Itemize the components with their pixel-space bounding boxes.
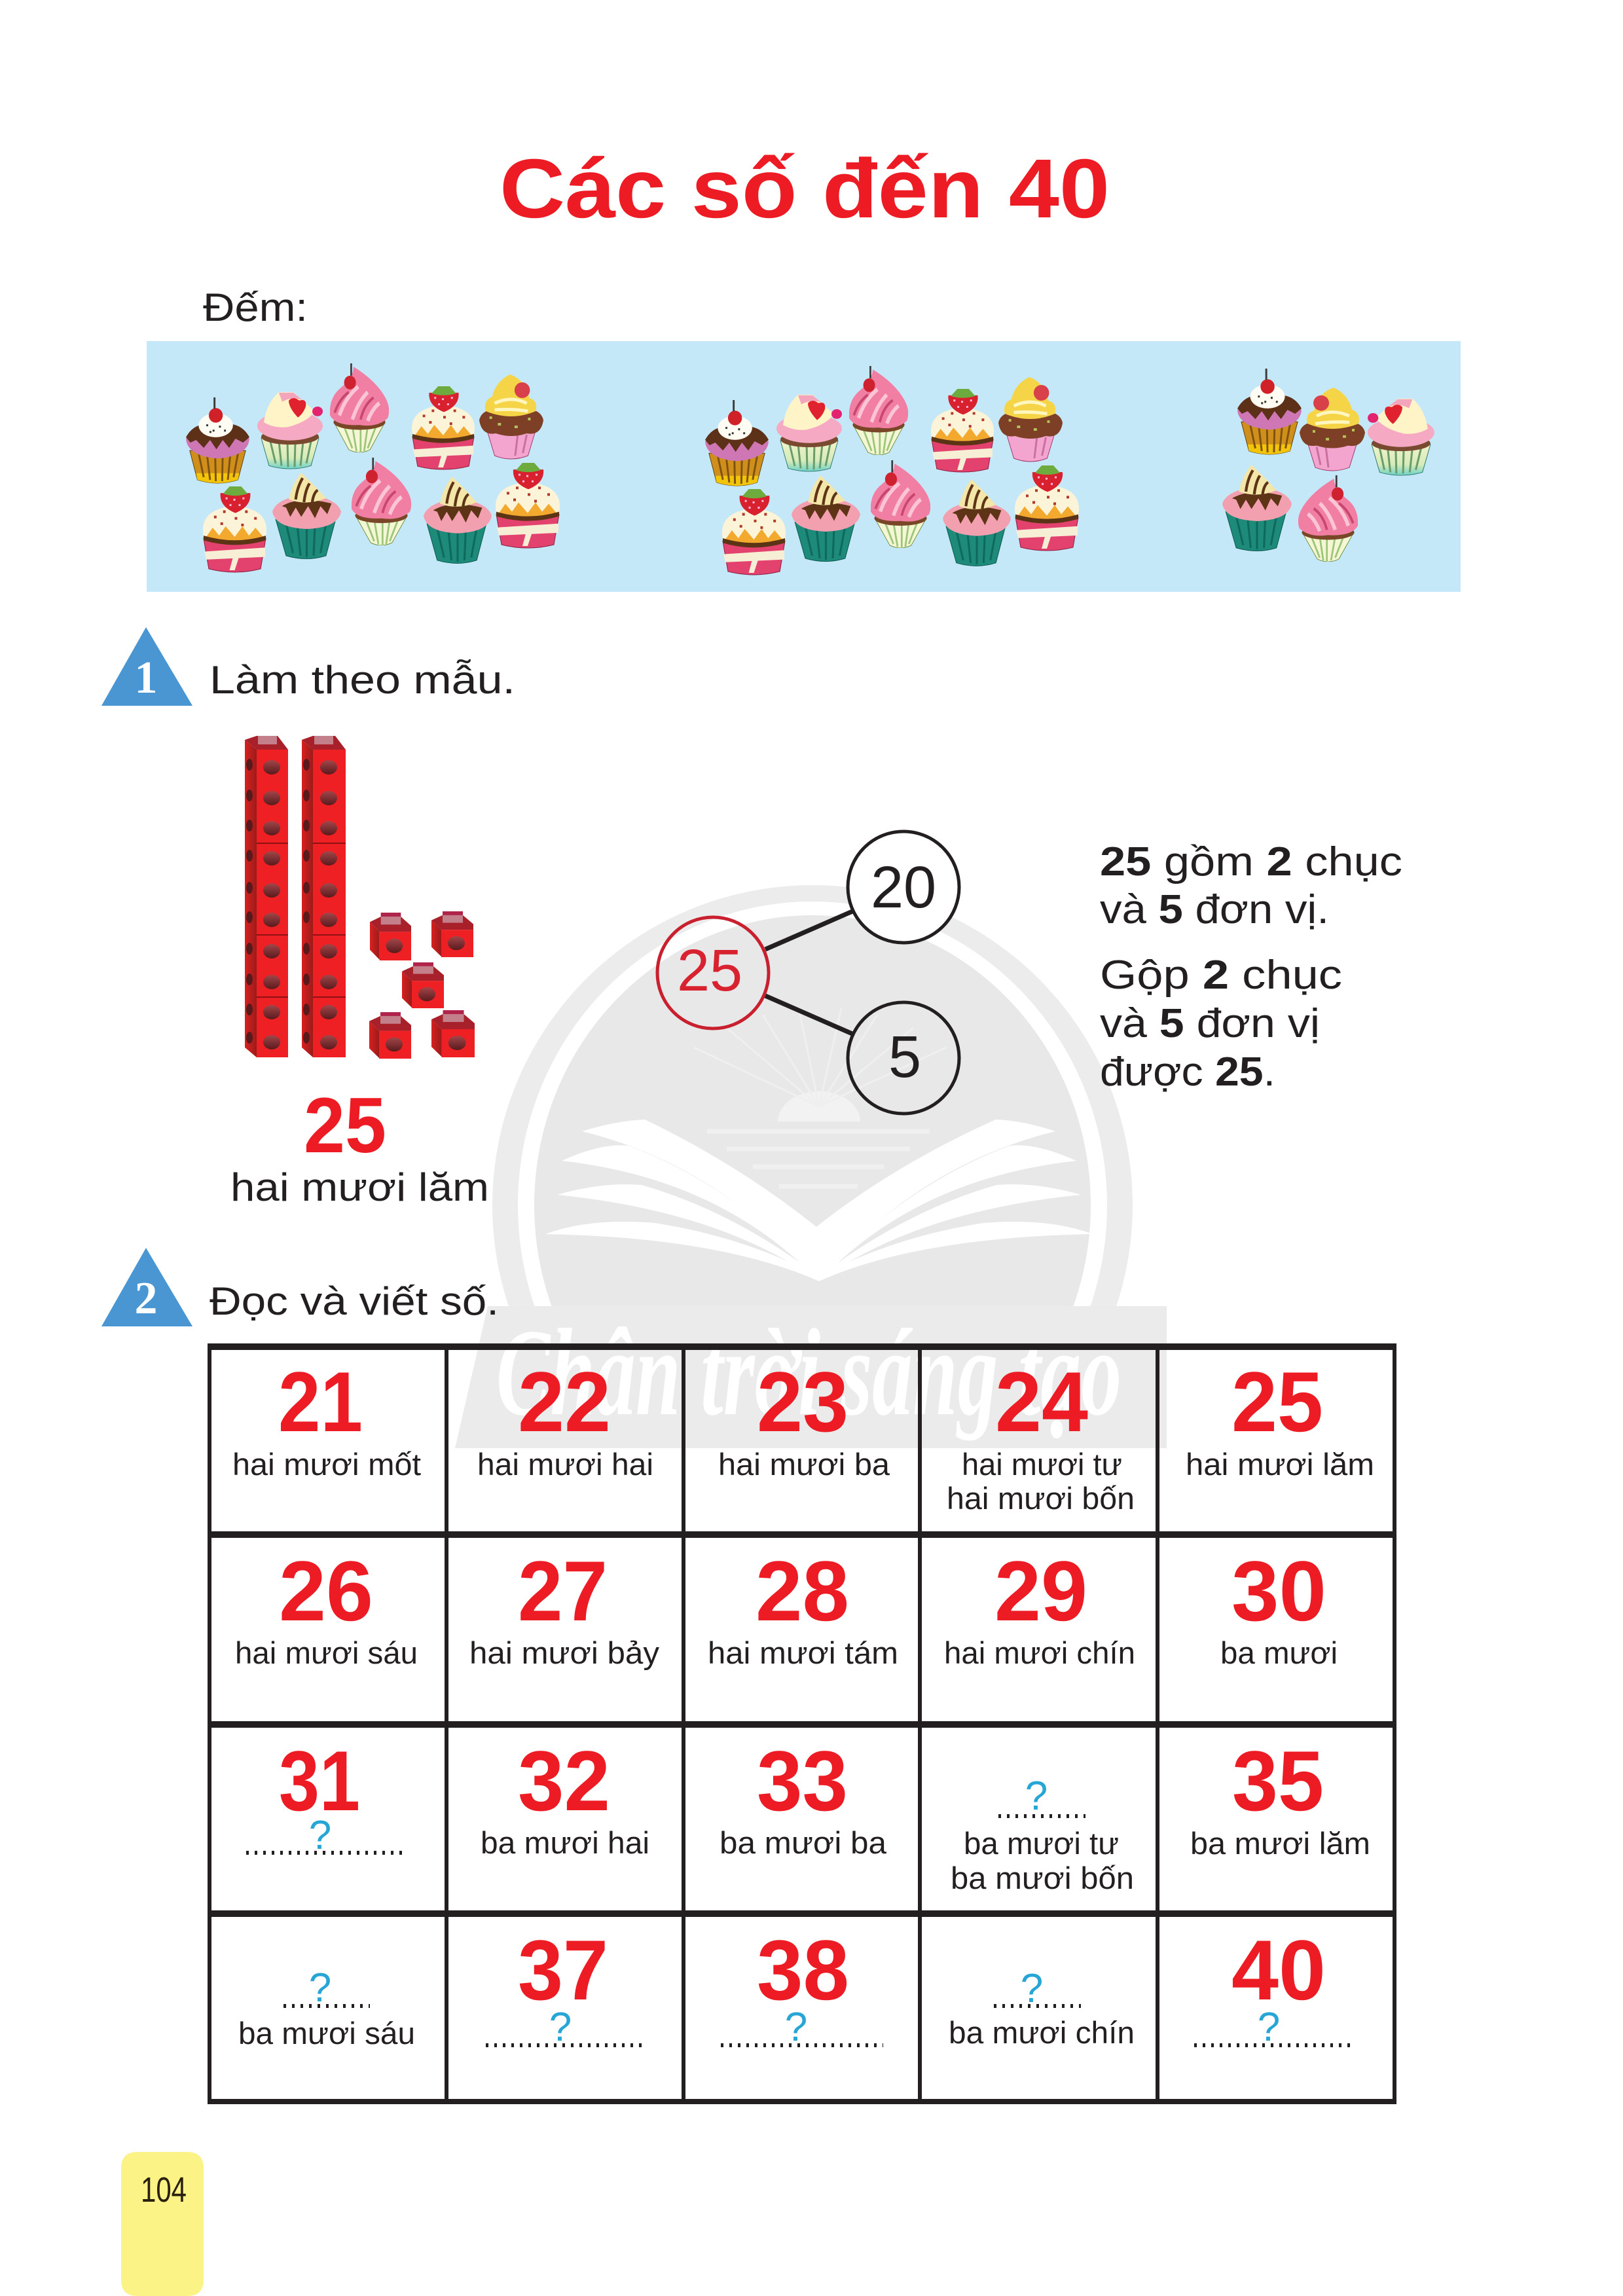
cell 28: hai mươi tám — [708, 1635, 898, 1670]
cell 33: 33 — [757, 1733, 848, 1829]
text block: explanation: được 25. — [1100, 1049, 1275, 1095]
text block: explanation — [1100, 839, 1402, 1095]
text block: explanation: Gộp 2 chục — [1100, 953, 1342, 998]
cell 37: 37 — [518, 1922, 608, 2018]
illustration: base-ten blocks — [245, 736, 475, 1059]
cell 34: ? — [1025, 1774, 1048, 1819]
cell 39 — [949, 1966, 1135, 2050]
cell 21 — [232, 1354, 421, 1482]
cell 33: ba mươi ba — [720, 1825, 887, 1860]
cell 28: 28 — [756, 1543, 849, 1639]
panel: cupcakes to count — [147, 341, 1461, 592]
heading: exercise 2: Đọc và viết số. — [210, 1279, 499, 1323]
cell 25: hai mươi lăm — [1186, 1447, 1374, 1482]
cell 38: 38 — [757, 1922, 849, 2018]
tower of ten, right — [302, 736, 346, 1057]
watermark: publisher logo — [455, 885, 1167, 1448]
icon: exercise 2 badge: 2 — [135, 1273, 157, 1324]
cell 22: hai mươi hai — [477, 1447, 653, 1482]
cell 30: ba mươi — [1220, 1635, 1338, 1670]
cell 36: ? — [309, 1965, 331, 2011]
cell 35 — [1190, 1733, 1370, 1861]
text block: explanation: 25 gồm 2 chục — [1100, 839, 1402, 884]
cell 32: ba mươi hai — [481, 1825, 649, 1860]
page number tab — [121, 2152, 204, 2296]
cell 37 — [486, 1922, 647, 2050]
cell 31: ? — [309, 1813, 331, 1858]
cell 40 — [1194, 1922, 1355, 2050]
watermark: publisher logo: Chân trời sáng tạo — [496, 1304, 1122, 1442]
circle: 5: 5 — [888, 1025, 921, 1090]
cell 26: 26 — [279, 1543, 373, 1639]
icon: exercise 2 badge — [101, 1248, 192, 1326]
cell 37: ? — [549, 2005, 572, 2050]
cell 31: 31 — [279, 1733, 360, 1829]
page number tab: 104 — [141, 2170, 187, 2210]
cell 40: 40 — [1231, 1922, 1326, 2018]
cell 25 — [1186, 1354, 1374, 1482]
cell 26: hai mươi sáu — [235, 1635, 418, 1670]
cell 24: 24 — [995, 1354, 1088, 1449]
circle: 5 — [848, 1002, 959, 1114]
tower of ten, left — [245, 736, 288, 1057]
cell 22: 22 — [518, 1354, 611, 1449]
cell 23 — [718, 1354, 890, 1482]
cell 38: ? — [785, 2005, 807, 2050]
cupcakes: five ones — [1222, 369, 1434, 562]
cupcakes: second group of ten — [705, 366, 1079, 575]
text: hai mươi lăm: hai mươi lăm — [230, 1165, 489, 1209]
cell 39: ? — [1021, 1966, 1043, 2011]
cell 36 — [238, 1965, 415, 2050]
cell 33 — [720, 1733, 887, 1860]
title: Các số đến 40 — [500, 142, 1110, 236]
circle: 20 — [848, 831, 959, 943]
text block: explanation: và 5 đơn vị — [1100, 1001, 1320, 1046]
text block: explanation: và 5 đơn vị. — [1100, 887, 1329, 932]
heading: exercise 1: Làm theo mẫu. — [210, 658, 515, 702]
cell 29 — [944, 1543, 1135, 1670]
cell 34 — [951, 1774, 1134, 1895]
circle: 25: 25 — [677, 938, 742, 1004]
cell 36: ba mươi sáu — [238, 2016, 415, 2050]
cell 24 — [947, 1354, 1135, 1516]
cell 23: hai mươi ba — [718, 1447, 890, 1482]
number: 25: 25 — [304, 1082, 386, 1169]
cell 40: ? — [1258, 2005, 1280, 2050]
heading: Đếm: Đếm: — [203, 285, 308, 329]
cell 32 — [481, 1733, 649, 1860]
cell 35: ba mươi lăm — [1190, 1826, 1370, 1861]
five unit cubes — [369, 911, 475, 1059]
cell 24: hai mươi bốn — [947, 1481, 1135, 1516]
cell 39: ba mươi chín — [949, 2015, 1135, 2050]
cell 35: 35 — [1232, 1733, 1324, 1829]
cell 29: 29 — [994, 1543, 1087, 1639]
cell 25: 25 — [1231, 1354, 1323, 1449]
cell 27 — [469, 1543, 660, 1670]
cupcakes: first group of ten — [186, 363, 560, 572]
circle: 20: 20 — [871, 855, 936, 920]
cell 34: ba mươi tư — [964, 1826, 1119, 1861]
icon: exercise 1 badge: 1 — [135, 653, 157, 703]
circle: 25 — [657, 917, 769, 1029]
cell 24: hai mươi tư — [962, 1447, 1122, 1482]
cell 22 — [477, 1354, 653, 1482]
cell 21: 21 — [278, 1354, 363, 1449]
cell 27: 27 — [518, 1543, 608, 1639]
cell 30: 30 — [1231, 1543, 1326, 1639]
cell 29: hai mươi chín — [944, 1635, 1135, 1670]
cell 30 — [1220, 1543, 1338, 1670]
cell 21: hai mươi mốt — [232, 1447, 421, 1482]
cell 32: 32 — [518, 1733, 610, 1829]
cell 34: ba mươi bốn — [951, 1861, 1134, 1895]
cell 38 — [721, 1922, 883, 2050]
cell 31 — [246, 1733, 408, 1858]
cell 26 — [235, 1543, 418, 1670]
cell 23: 23 — [757, 1354, 848, 1449]
cell 28 — [708, 1543, 898, 1670]
cell 27: hai mươi bảy — [469, 1635, 660, 1670]
table: numbers 21 to 40 — [208, 1344, 1396, 2104]
diagram: number bond 25 = 20 + 5 — [657, 831, 959, 1114]
icon: exercise 1 badge — [101, 627, 192, 706]
